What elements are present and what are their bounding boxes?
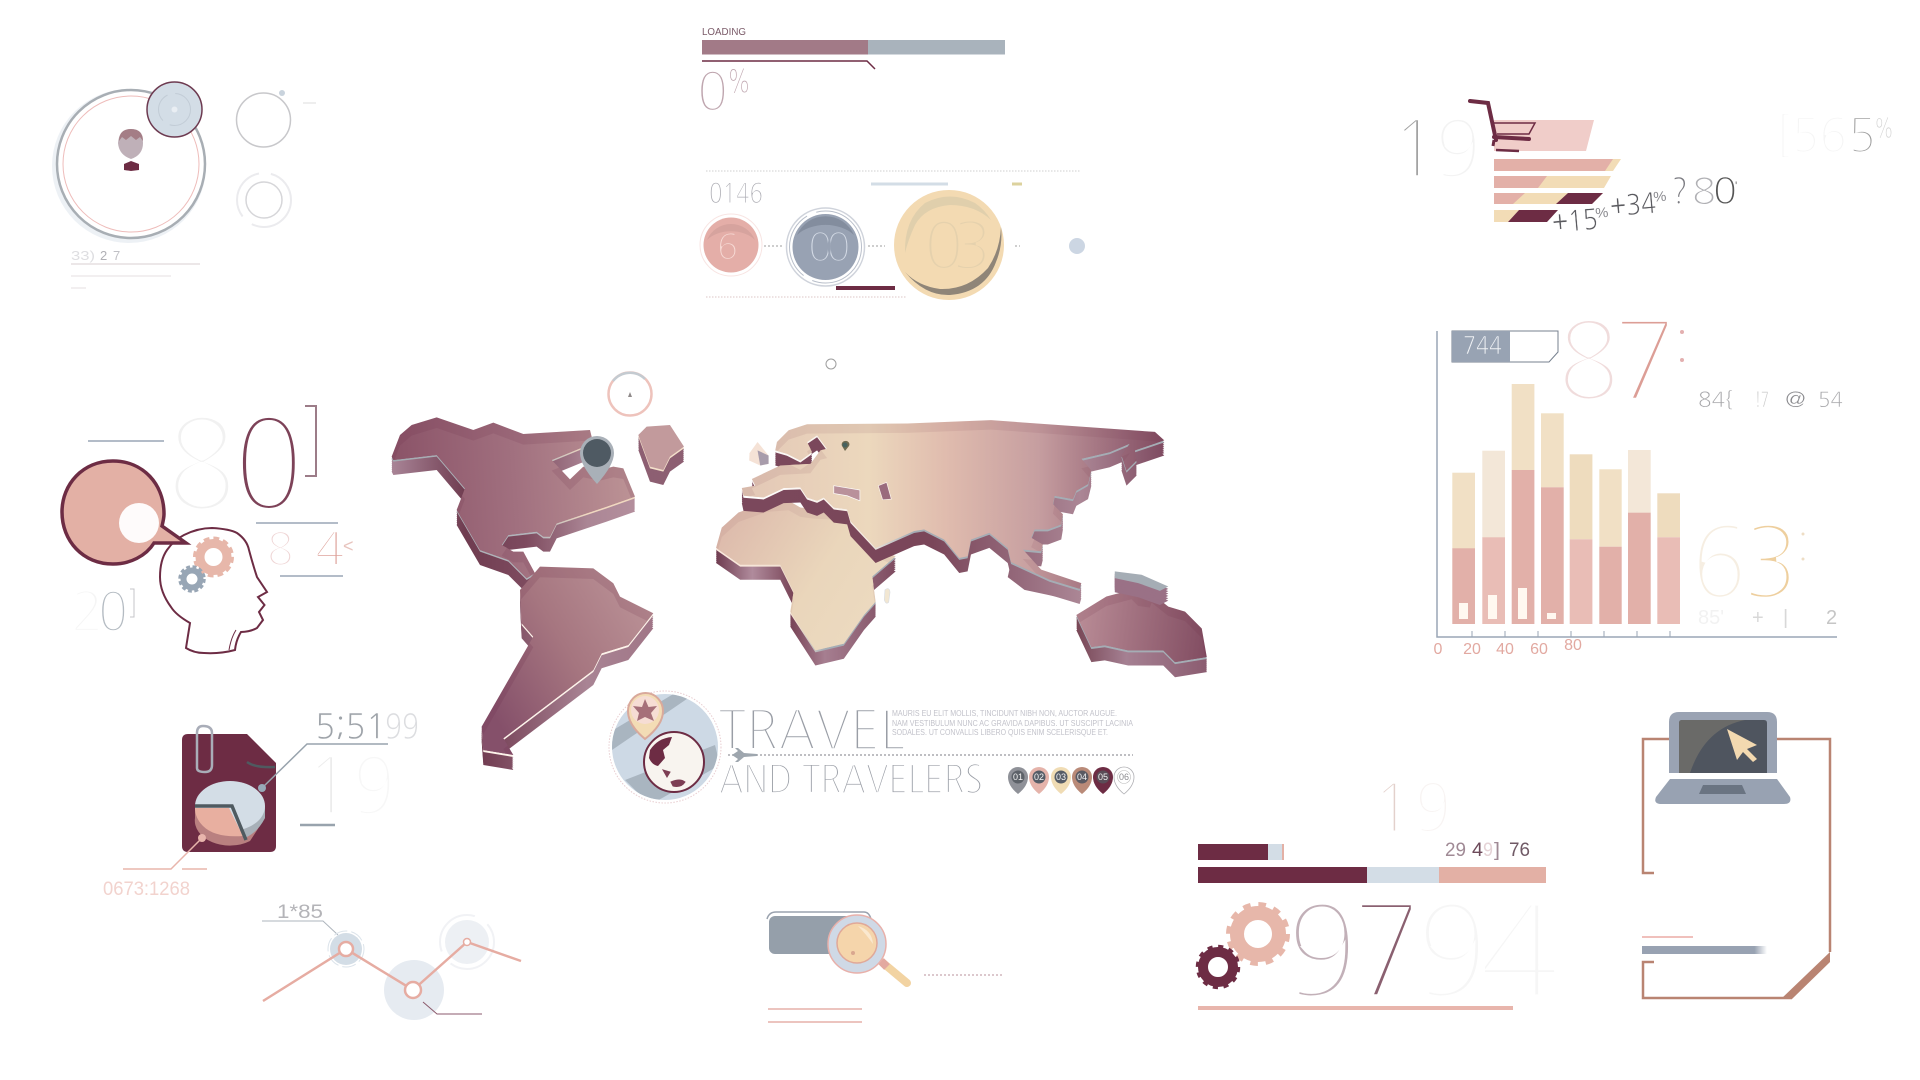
panel: idea head: [62, 402, 354, 653]
pin: Europe: [842, 441, 849, 451]
folded page frame: [1643, 739, 1830, 998]
values row: ]: [1494, 840, 1500, 861]
big number 63: 3: [1743, 514, 1799, 613]
pin: North America: [580, 436, 614, 484]
number 84: [267, 527, 354, 572]
values row: [1445, 840, 1530, 861]
icon: globe: [644, 732, 704, 792]
inner white bars: [1459, 588, 1556, 619]
small data row: [1698, 389, 1843, 411]
callout value: 99: [385, 710, 419, 744]
faint data row: [1698, 607, 1837, 629]
sand bubble 03: [894, 190, 1004, 300]
cream upper bars: [1452, 384, 1680, 549]
callout value: 5;51: [315, 710, 386, 744]
value tag 744: [1452, 331, 1558, 362]
panel: laptop note: [1642, 712, 1830, 999]
+15% label: +15: [1551, 206, 1599, 238]
?80 label: ': [1735, 179, 1737, 193]
big number 63: 6: [1691, 514, 1747, 613]
5% readout: [56: [1775, 112, 1847, 159]
panel: document pie: [103, 710, 419, 900]
callout value: [315, 710, 419, 744]
5% readout: %: [1874, 115, 1894, 142]
big number 63: [1691, 514, 1804, 613]
label: profile number: 7: [113, 248, 120, 263]
loading label: LOADING: [702, 27, 746, 38]
faded number 19: 1: [1372, 775, 1413, 842]
continent: Greenland: [638, 425, 684, 485]
values row: 4: [1472, 840, 1483, 861]
number 84: 8: [267, 527, 294, 572]
bubble connectors: [764, 245, 1020, 247]
+34% label: +34: [1609, 190, 1657, 222]
map: Old World: [716, 420, 1207, 677]
title: TRAVEL: TRAVEL: [718, 704, 905, 758]
island: Madagascar: [884, 589, 890, 603]
big number 80: [166, 402, 304, 529]
values row: 29: [1445, 840, 1466, 861]
panel: shopping cart chart: [1391, 101, 1894, 238]
small ring bottom: [237, 173, 291, 227]
body copy: NAM VESTIBULUM NUNC AC GRAVIDA DAPIBUS. UT SUSCIPIT LACINIA: [892, 719, 1134, 728]
compass ring: [608, 372, 652, 416]
large profile ring: [52, 89, 206, 243]
continent: Africa: [716, 501, 896, 665]
pin 03: 03: [1056, 772, 1066, 782]
number 20: 0: [98, 585, 128, 639]
dark mark: [247, 762, 275, 767]
faded number 19: 1: [1391, 111, 1438, 189]
big number 9794: 7: [1351, 889, 1423, 1016]
big number 87: [1557, 308, 1684, 416]
icon: head outline: [160, 528, 267, 653]
label underlines: [71, 264, 200, 288]
rule: [280, 575, 343, 577]
faded number 19: 9: [1435, 111, 1481, 189]
faded number 19: [305, 748, 395, 826]
small blue node: [1069, 238, 1085, 254]
search bar top edge: [767, 912, 871, 919]
?80 label: 8: [1692, 174, 1716, 210]
small data row: 54: [1818, 390, 1843, 411]
continent: South America: [482, 567, 653, 770]
island: New Guinea: [1115, 571, 1168, 605]
slate bubble 00: 00: [808, 227, 849, 267]
counter number: 0146: [709, 180, 763, 208]
subtitle: AND TRAVELERS: AND TRAVELERS: [719, 760, 983, 799]
continent: North America: [392, 417, 635, 593]
slate bubble 00: [786, 208, 864, 286]
percentage readout: [697, 66, 751, 118]
icon: cursor: [1727, 729, 1757, 762]
search bar: [769, 916, 870, 954]
big number 80: 0: [233, 402, 304, 529]
dotted leader: [924, 974, 1003, 976]
axis labels: [1434, 637, 1582, 658]
percentage readout: %: [727, 66, 751, 98]
icon: person bust: [118, 129, 143, 171]
dotted rules: [706, 171, 1080, 297]
axis labels: 60: [1530, 641, 1548, 658]
axis labels: 40: [1496, 641, 1514, 658]
big number 9794: [1286, 889, 1562, 1016]
icon: paper clip: [197, 726, 212, 772]
panel: world map: [392, 372, 1207, 770]
faded number 19: 9: [1415, 775, 1451, 842]
sand bubble 03: 03: [924, 214, 986, 279]
callout line pink: [123, 834, 207, 869]
values row: 9: [1483, 840, 1493, 861]
bracket: [305, 406, 316, 476]
rule: [300, 824, 335, 826]
cart backdrop shape: [1494, 120, 1594, 151]
5% readout: [1775, 112, 1894, 159]
icon: shopping cart: [1470, 101, 1535, 151]
rule: [256, 522, 338, 524]
label: profile number: [71, 248, 120, 263]
5% readout: 5: [1848, 112, 1876, 159]
rule: [88, 440, 164, 442]
data nodes: [339, 938, 470, 998]
faded number 19: 1: [305, 748, 352, 826]
big number 80: 8: [166, 402, 237, 529]
short stacked bar: [1198, 844, 1284, 860]
leader line bottom: [423, 1002, 482, 1014]
values row: 76: [1509, 840, 1530, 861]
big number 9794: 4: [1477, 889, 1562, 1016]
page fold: [1781, 952, 1830, 999]
faded number 19: [1391, 111, 1481, 189]
small data row: @: [1785, 390, 1806, 411]
continent: Eurasia: [742, 420, 1164, 604]
+34% label: %: [1653, 188, 1667, 205]
pin 01: 01: [1013, 772, 1023, 782]
icon: maroon gear: [1198, 947, 1238, 987]
pink value: 0673:1268: [103, 879, 190, 900]
number 84: 4: [315, 527, 345, 572]
faded number 19: 9: [353, 748, 395, 826]
value tag 744: 744: [1463, 334, 1502, 358]
icon: gray gear: [180, 567, 204, 591]
continent: Australia: [1076, 590, 1207, 677]
icon: pink gear: [196, 539, 232, 575]
gray bar: [1642, 946, 1767, 954]
icon: airplane: [732, 748, 757, 762]
icon: 3D pie chart: [195, 781, 265, 846]
body copy: MAURIS EU ELIT MOLLIS, TINCIDUNT NIBH NON, AUCTOR AUGUE.: [892, 709, 1117, 718]
number 84: <: [343, 536, 354, 556]
icon: speech bubble: [62, 461, 186, 564]
pink bubble 06: [700, 214, 762, 276]
panel: title block: [605, 690, 1134, 805]
+15% label: %: [1595, 204, 1609, 221]
big number 87: 7: [1612, 308, 1678, 416]
icon: document: [182, 734, 276, 852]
body copy: [892, 709, 1134, 737]
panel: loading bar: [697, 27, 1005, 118]
icon: magnifier: [828, 915, 907, 983]
panel: bar chart: [1434, 308, 1843, 658]
flight path: [728, 748, 1133, 762]
empty input field: [768, 1009, 862, 1022]
pin 02: 02: [1034, 772, 1044, 782]
percentage readout: 0: [697, 66, 728, 118]
big number 9794: 9: [1416, 889, 1488, 1016]
panel: bubble sequence: [700, 171, 1085, 300]
callout line gray: [258, 744, 388, 792]
progress bar: [702, 40, 1005, 54]
pink bubble 06: 6: [717, 230, 738, 265]
axis labels: 0: [1434, 641, 1443, 658]
number 20: 2: [71, 585, 104, 639]
axis ticks: [1472, 631, 1670, 637]
leader line: [262, 921, 338, 935]
small marker circle: [826, 359, 836, 369]
island: Britain: [749, 442, 769, 466]
?80 label: [1671, 174, 1737, 210]
panel: search: [767, 912, 1003, 1022]
small ring top: [236, 90, 316, 147]
panel: profile circles: [52, 82, 316, 288]
trend line: [263, 942, 521, 1001]
progress pointer line: [702, 61, 875, 69]
icon: laptop: [1655, 712, 1790, 804]
faint data row: 2: [1826, 607, 1837, 629]
pink lower bars: [1452, 470, 1680, 624]
big number 87: 8: [1557, 308, 1620, 416]
long stacked bar: [1198, 867, 1546, 883]
faint data row: |: [1783, 607, 1788, 629]
big number 9794: 9: [1286, 889, 1358, 1016]
label: profile number: 2: [100, 248, 107, 263]
faded number 19: [1372, 775, 1451, 842]
axis labels: 20: [1463, 641, 1481, 658]
chart value: 1*85: [277, 902, 323, 923]
faint data row: 85': [1698, 607, 1724, 629]
pin 05: 05: [1098, 772, 1108, 782]
map: Americas: [392, 417, 684, 770]
small data row: 84{: [1698, 389, 1733, 411]
badge: globe and pin: [605, 690, 721, 805]
icon: pink gear: [1229, 905, 1287, 963]
accent dashes: [836, 182, 1022, 290]
panel: progress and gears: [1198, 775, 1562, 1016]
?80 label: ?: [1671, 174, 1688, 210]
faint data row: +: [1752, 607, 1764, 629]
numbered pins: [1008, 767, 1134, 794]
pin 04: 04: [1077, 772, 1087, 782]
pink dash: [1642, 936, 1693, 938]
number 20: [71, 585, 134, 639]
underline: [1198, 1006, 1513, 1010]
stacked slanted bars: [1494, 159, 1621, 222]
axis labels: 80: [1564, 637, 1582, 654]
pin 06: 06: [1119, 772, 1129, 782]
chart axes: [1437, 331, 1837, 637]
small data row: !7: [1755, 390, 1769, 411]
icon: star pin: [628, 693, 663, 739]
label: profile number: 33): [71, 248, 95, 263]
highlight discs: [328, 915, 494, 1020]
panel: line chart: [262, 902, 521, 1020]
body copy: SODALES. UT CONVALLIS LIBERO QUIS ENIM SCELERISQUE ET.: [892, 728, 1108, 737]
small magnified disc: [147, 82, 202, 137]
?80 label: 0: [1713, 174, 1737, 210]
